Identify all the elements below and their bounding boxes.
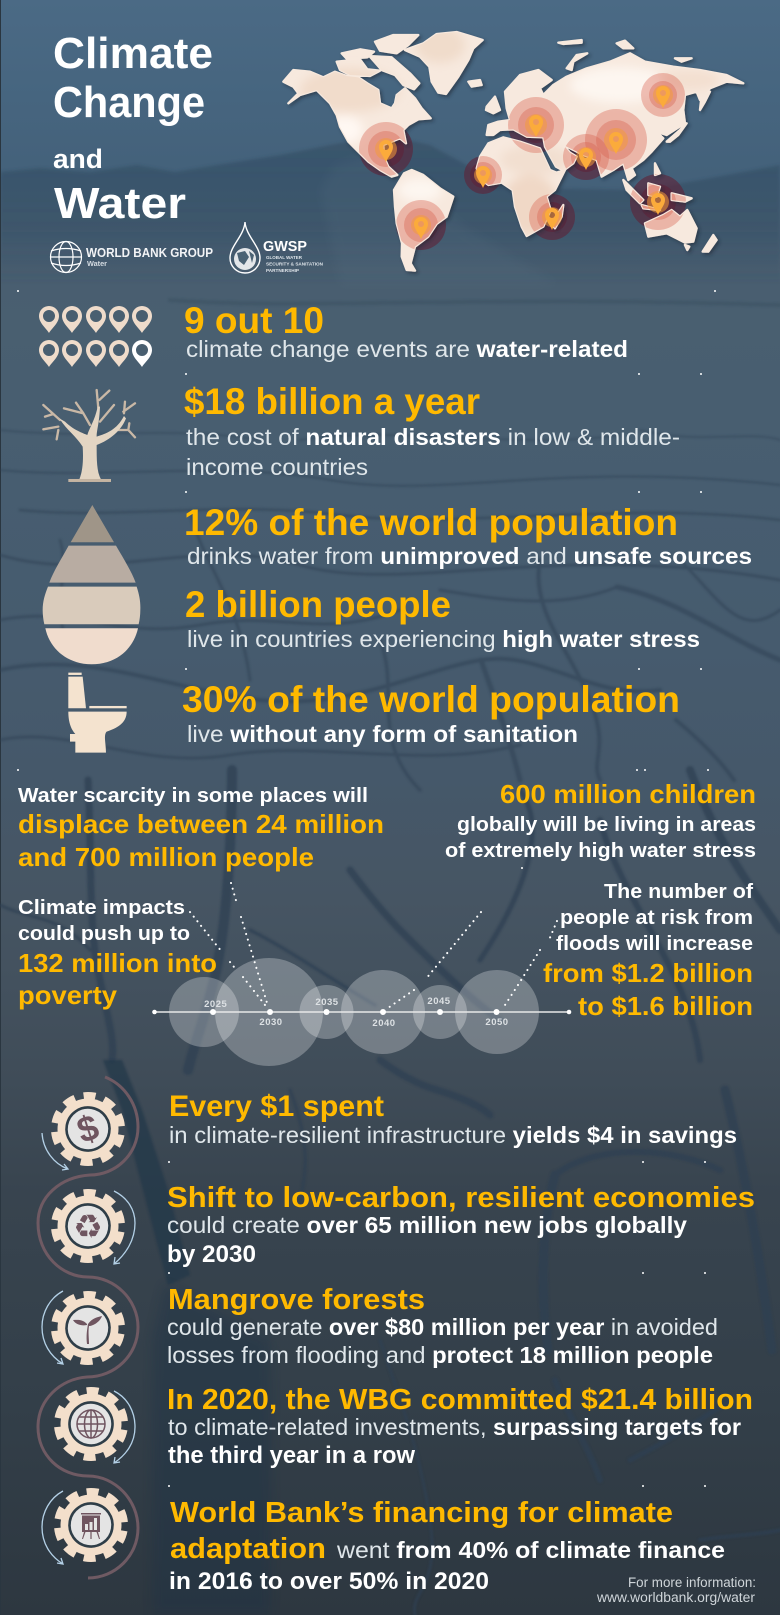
stat: $18 billion a year: income countries (186, 454, 368, 480)
callout: water scarcity (18, 785, 384, 872)
solution: every $1 spent: Every $1 spent (169, 1090, 384, 1123)
callout: people at risk from floods (543, 881, 753, 1021)
timeline 2025 to 2050: 2035 (315, 997, 339, 1008)
stat: 2 billion people: 2 billion people (185, 584, 451, 625)
footer: more information: For more information: (628, 1575, 756, 1590)
callout: water scarcity: and 700 million people (18, 842, 314, 872)
stat: 2 billion people: live in countries experiencing high water stress (187, 626, 700, 652)
icon: sliced water drop (43, 505, 140, 664)
callout: people at risk from floods: people at risk from (560, 907, 753, 929)
callout: people at risk from floods: to $1.6 billion (578, 991, 753, 1021)
callout: people at risk from floods: floods will increase (556, 933, 753, 955)
logo: GWSP: PARTNERSHIP (266, 268, 299, 273)
timeline 2025 to 2050: 2025 (204, 999, 227, 1010)
stat: 2 billion people (185, 584, 700, 652)
stat: 12% of the world population (184, 502, 752, 569)
solution: adaptation financing: adaptation (170, 1533, 326, 1565)
callout: climate impacts and poverty: Climate impacts (18, 897, 185, 919)
solution: adaptation financing (169, 1497, 725, 1595)
callout: climate impacts and poverty: poverty (18, 980, 118, 1010)
icon: gear with recycling: ♻ (73, 1207, 103, 1246)
callout: climate impacts and poverty: 132 million into (18, 948, 217, 978)
callout: water scarcity: displace between 24 million (18, 809, 384, 839)
timeline 2025 to 2050: 2045 (427, 996, 451, 1007)
stat: 9 out of 10 (184, 300, 628, 362)
solution: WBG committed $21.4 billion: to climate-related investments, surpassing targets for (168, 1414, 741, 1440)
icon: dead tree (43, 390, 135, 482)
title: Change (53, 78, 205, 127)
icon: toilet (68, 673, 127, 753)
icon: gear with sprout (49, 1289, 127, 1367)
solution: every $1 spent (169, 1090, 737, 1148)
timeline 2025 to 2050: 2050 (485, 1017, 509, 1028)
solution: low-carbon economies: could create over 65 million new jobs globally (167, 1212, 687, 1238)
callout: water scarcity: Water scarcity in some places will (18, 785, 368, 807)
solution: adaptation financing: in 2016 to over 50% in 2020 (169, 1568, 489, 1595)
solution: WBG committed $21.4 billion: In 2020, the WBG committed $21.4 billion (167, 1384, 753, 1416)
callout: climate impacts and poverty (18, 897, 217, 1010)
solution: mangrove forests: could generate over $80 million per year in avoided (167, 1314, 718, 1340)
logo: GWSP: GWSP (263, 239, 307, 255)
stat: 30% of the world population (182, 679, 680, 747)
title: Water (54, 179, 186, 228)
solution: low-carbon economies (167, 1182, 755, 1268)
logo: GWSP: GLOBAL WATER (266, 255, 303, 260)
stat: 9 out of 10: climate change events are water-related (186, 336, 628, 362)
logo: GWSP (230, 222, 323, 273)
serpentine connector (38, 1077, 138, 1578)
solution: low-carbon economies: Shift to low-carbon, resilient economies (167, 1182, 755, 1214)
solution: adaptation financing: went from 40% of climate finance (336, 1537, 725, 1563)
title: Climate (53, 29, 213, 78)
callout: people at risk from floods: The number of (604, 881, 753, 903)
logo: World Bank Group: Water (87, 259, 107, 268)
solution: WBG committed $21.4 billion (167, 1384, 753, 1469)
solution: low-carbon economies: by 2030 (167, 1241, 256, 1268)
callout: people at risk from floods: from $1.2 billion (543, 958, 753, 988)
stat: $18 billion a year (184, 381, 680, 480)
world map with hotspots (283, 27, 743, 271)
solution: adaptation financing: World Bank’s financing for climate (170, 1497, 673, 1529)
callout: 600 million children: 600 million children (500, 779, 756, 809)
stat: 9 out of 10: 9 out 10 (184, 300, 324, 341)
icon: gear with recycling (49, 1187, 127, 1265)
icon: gear with dollar (49, 1090, 127, 1168)
callout: climate impacts and poverty: could push up to (18, 923, 190, 945)
solution: mangrove forests: losses from flooding and protect 18 million people (167, 1342, 713, 1368)
callout: 600 million children: globally will be living in areas (457, 814, 756, 836)
callout: 600 million children: of extremely high water stress (445, 840, 756, 862)
stat: 30% of the world population: 30% of the world population (182, 679, 680, 720)
stat: 12% of the world population: drinks water from unimproved and unsafe sources (187, 543, 752, 569)
footer: more information (596, 1575, 756, 1605)
icon: gear with globe (52, 1385, 130, 1463)
logo: World Bank Group (50, 242, 213, 272)
timeline 2025 to 2050: 2030 (259, 1017, 283, 1028)
timeline 2025 to 2050 (152, 883, 571, 1066)
icon: gear with dollar: $ (72, 1106, 104, 1151)
stat: 30% of the world population: live without any form of sanitation (187, 721, 578, 747)
solution: mangrove forests: Mangrove forests (168, 1284, 425, 1316)
footer: more information: www.worldbank.org/water (596, 1590, 756, 1605)
logo: World Bank Group: WORLD BANK GROUP (86, 245, 213, 260)
stat: $18 billion a year: the cost of natural disasters in low & middle- (186, 424, 680, 450)
title (53, 29, 213, 228)
logo: GWSP: SECURITY & SANITATION (266, 262, 323, 266)
solution: mangrove forests (167, 1284, 718, 1368)
stat: $18 billion a year: $18 billion a year (184, 381, 480, 422)
rotation arrows (42, 1133, 135, 1564)
solution: every $1 spent: in climate-resilient infrastructure yields $4 in savings (169, 1122, 737, 1148)
icon: ten map pins (39, 306, 152, 367)
callout: 600 million children (445, 779, 756, 862)
timeline 2025 to 2050: 2040 (372, 1018, 396, 1029)
stat: 12% of the world population: 12% of the world population (184, 502, 678, 543)
icon: gear with chart board (52, 1486, 130, 1564)
solution: WBG committed $21.4 billion: the third year in a row (168, 1442, 415, 1469)
title: and (53, 144, 103, 174)
